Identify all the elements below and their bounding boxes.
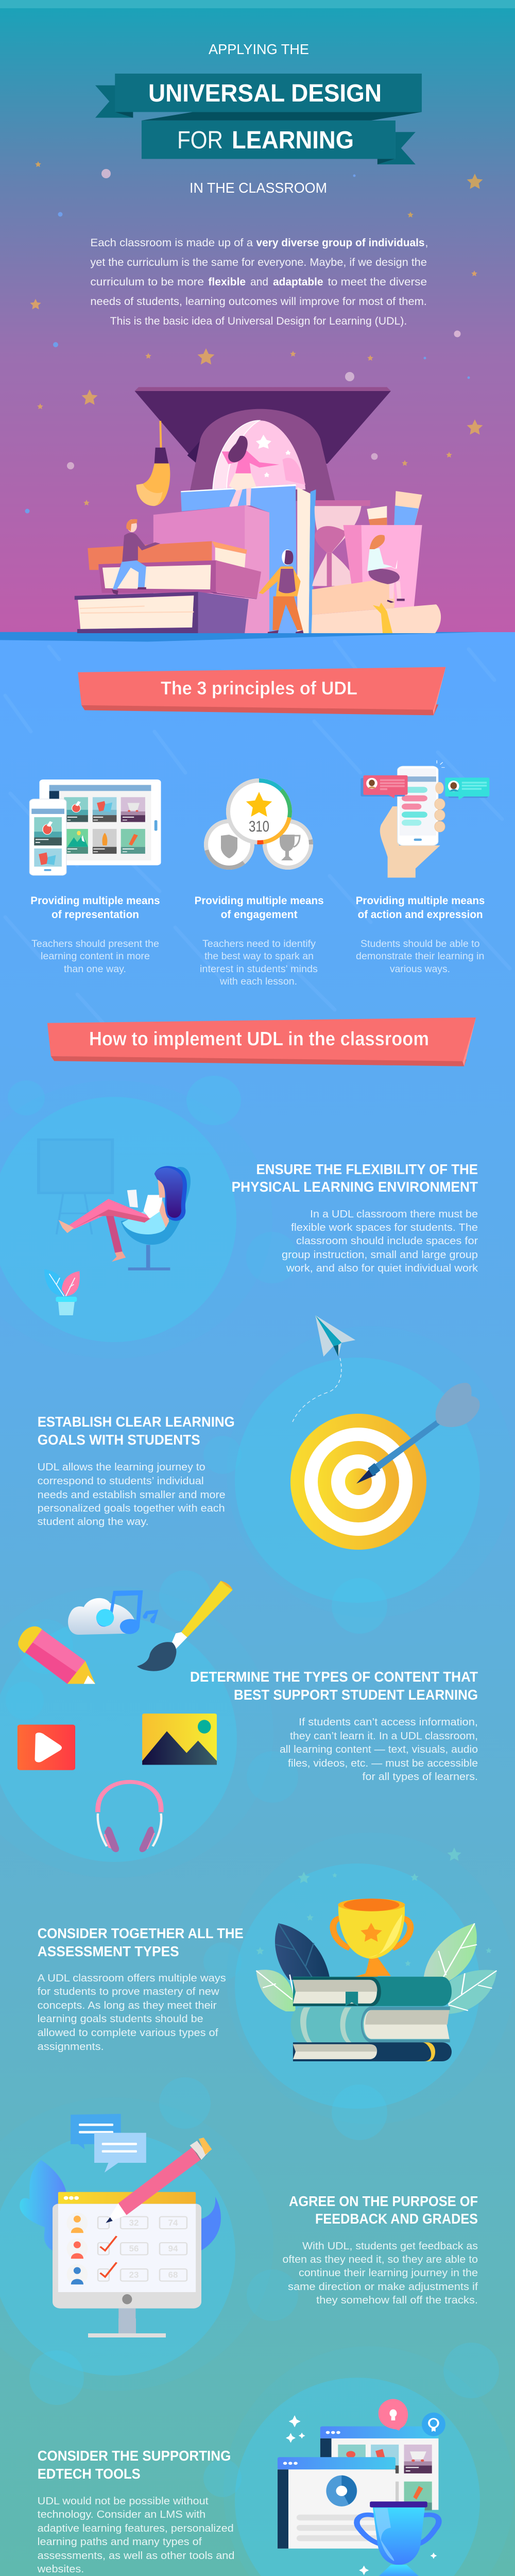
lower section gradient background [0,632,515,2576]
three principles descriptions: interest in students' minds [200,964,318,975]
text block: consider together all the assessment types [38,1925,244,2053]
tassel [136,421,170,506]
orange book [88,541,247,570]
small stars around the trophy [256,1848,492,1966]
text block: consider together all the assessment types: concepts. As long as they meet their [38,2000,217,2011]
text block: consider together all the assessment types: for students to prove mastery of new [38,1986,219,1997]
text block: consider together all the assessment types: learning goals students should be [38,2013,203,2025]
text block: determine types of content: they can’t learn it. In a UDL classroom, [290,1731,478,1742]
illustration: feedback and grades screen: 74 [168,2218,178,2228]
text block: ensure the flexibility: PHYSICAL LEARNING ENVIRONMENT [232,1179,478,1195]
student with backpack [259,549,303,633]
title ribbon banner: UNIVERSAL DESIGN [148,80,382,107]
text block: consider the supporting edtech tools [37,2448,234,2575]
text block: determine types of content: all learning content — text, visuals, audio [280,1744,478,1755]
text block: determine types of content: for all types of learners. [363,1771,478,1783]
text block: ensure the flexibility: ENSURE THE FLEXIBILITY OF THE [256,1161,478,1177]
intro paragraph: needs of students, learning outcomes will improve for most of them. [90,296,427,308]
three principles descriptions: than one way. [64,964,126,975]
chat bubbles [71,2114,146,2173]
text block: consider the supporting edtech tools: assessments, as well as other tools and [38,2550,234,2562]
three principles descriptions: various ways. [390,964,450,975]
text block: determine types of content [190,1669,478,1783]
pink book [153,505,269,633]
back window [320,2426,438,2511]
text block: determine types of content: If students can’t access information, [299,1717,478,1728]
text block: determine types of content: BEST SUPPORT STUDENT LEARNING [234,1687,478,1703]
three principles descriptions: learning content in more [41,951,150,962]
badges [379,2399,445,2436]
text block: ensure the flexibility: flexible work spaces for students. The [291,1222,478,1233]
monitor stand [118,2309,135,2326]
icon: headphones [98,1782,161,1852]
scrolls [312,579,441,633]
text block: establish clear learning goals: UDL allows the learning journey to [38,1462,205,1473]
three principles descriptions: Students should be able to [360,939,480,950]
three principles headings: of representation [52,909,139,921]
three principles descriptions: demonstrate their learning in [356,951,484,962]
intro paragraph: , [425,237,428,249]
text block: establish clear learning goals: ESTABLISH CLEAR LEARNING [38,1414,235,1430]
section banner: how to implement UDL: How to implement UDL in the classroom [89,1028,429,1050]
text block: ensure the flexibility: work, and also for quiet individual work [286,1263,478,1274]
header gradient background [0,0,515,639]
icon: target with dart [290,1383,480,1550]
text block: consider the supporting edtech tools: EDTECH TOOLS [38,2466,141,2482]
text block: ensure the flexibility: classroom should include spaces for [296,1235,478,1247]
check marks [100,2236,116,2277]
text block: establish clear learning goals: student along the way. [38,1516,149,1528]
text block: ensure the flexibility: group instruction, small and large group [282,1249,478,1261]
girl on the book [222,436,279,508]
title ribbon banner [95,74,422,164]
illustration: feedback and grades screen: 32 [129,2218,139,2228]
intro paragraph: This is the basic idea of Universal Design for Learning (UDL). [110,315,407,327]
three principles descriptions: the best way to spark an [204,951,314,962]
text block: consider together all the assessment types: allowed to complete various types of [38,2027,218,2039]
text block: consider the supporting edtech tools: learning paths and many types of [38,2536,202,2548]
graduation cap [134,387,391,501]
sparkles [286,2415,437,2575]
section banner: the 3 principles of UDL [78,667,445,715]
star decorations in the dome [256,435,290,477]
icon: play button [18,1724,75,1770]
three principles headings: Providing multiple means [30,895,160,907]
text block: establish clear learning goals: GOALS WITH STUDENTS [38,1432,200,1448]
title: in the classroom: IN THE CLASSROOM [190,180,327,196]
three principles headings [30,895,485,921]
text block: determine types of content: DETERMINE THE TYPES OF CONTENT THAT [190,1669,478,1685]
text block: agree on the purpose of feedback: same direction or make adjustments if [288,2281,478,2293]
woman [59,1166,187,1262]
text block: consider together all the assessment types: assignments. [38,2041,104,2053]
title: applying the: APPLYING THE [209,41,309,57]
title ribbon banner: FOR [177,127,223,154]
text block: establish clear learning goals: correspond to students’ individual [38,1476,204,1487]
text block: establish clear learning goals [38,1414,235,1528]
section banner: how to implement UDL [47,1018,476,1066]
grade rows [98,2217,187,2281]
text block: consider the supporting edtech tools: adaptive learning features, personalized [38,2523,234,2534]
intro paragraph: very diverse group of individuals [256,237,424,249]
icon: tablet and phone with course cards [29,779,161,875]
icon: badges with score 310 [204,778,313,870]
decorative stars and dots [25,161,483,513]
intro paragraph: curriculum to be more [90,276,204,288]
bottom purple book [75,592,249,633]
easel [37,1139,114,1234]
illustration: feedback and grades screen [20,2114,221,2337]
central score badge [226,778,292,844]
illustration: feedback and grades screen: 23 [129,2270,139,2280]
gold trophy [333,1899,410,1977]
stacked books [290,1977,452,2061]
text block: consider the supporting edtech tools: CONSIDER THE SUPPORTING [38,2448,231,2464]
intro paragraph: and [250,276,268,288]
three principles headings: Providing multiple means [195,895,324,907]
text block: agree on the purpose of feedback: they somehow fall off the tracks. [316,2295,478,2306]
text block: establish clear learning goals: needs and establish smaller and more [38,1489,226,1501]
monitor [53,2192,201,2309]
section banner: the 3 principles of UDL: The 3 principles of UDL [161,677,357,699]
intro paragraph: adaptable [273,276,323,288]
icon: pencil [18,1626,95,1684]
middle book [98,560,261,599]
intro paragraph: yet the curriculum is the same for everyone. Maybe, if we design the [90,257,427,268]
illustration: feedback and grades screen: 94 [168,2244,178,2253]
illustration: woman reading in a chair by an easel [37,1139,191,1315]
text block: consider together all the assessment types: ASSESSMENT TYPES [38,1943,179,1959]
icon: image with mountains [142,1714,217,1765]
leaves behind screen [20,2160,221,2250]
three principles headings: Providing multiple means [356,895,485,907]
title ribbon banner: LEARNING [232,127,354,154]
illustration: feedback and grades screen: 56 [129,2244,139,2253]
illustration: content type icons [18,1581,233,1852]
intro paragraph [90,237,428,327]
illustration: graduation cap with books and students [0,387,483,642]
pencil writing [106,2138,212,2223]
three principles descriptions: Teachers should present the [31,939,159,950]
text block: consider the supporting edtech tools: UDL would not be possible without [38,2496,209,2507]
chair [121,1167,191,1270]
three principles descriptions: Teachers need to identify [202,939,316,950]
text block: agree on the purpose of feedback: often as they need it, so they are able to [282,2254,478,2265]
text block: agree on the purpose of feedback: FEEDBACK AND GRADES [315,2211,478,2227]
left shield badge [204,819,254,870]
wave under the scene [0,632,483,642]
text block: consider the supporting edtech tools: websites. [37,2564,84,2575]
blue book standing [181,484,316,633]
text block: establish clear learning goals: personalized goals together with each [38,1503,225,1514]
icon: paper plane with dashed trail [293,1315,355,1422]
hourglass [312,500,370,586]
climbing man [112,519,160,595]
text block: consider together all the assessment types: CONSIDER TOGETHER ALL THE [38,1925,244,1941]
three principles descriptions [31,939,484,987]
icon: hand holding phone with chat bubbles [360,760,489,878]
intro paragraph: flexible [208,276,246,288]
intro paragraph: to meet the diverse [328,276,427,288]
avatars [66,2212,88,2285]
icon: badges with score 310: 310 [249,818,269,835]
three principles descriptions: with each lesson. [219,976,297,987]
text block: agree on the purpose of feedback: With UDL, students get feedback as [302,2241,478,2252]
seated woman with laptop [367,535,405,603]
leaves [256,1923,496,2014]
three principles headings: of engagement [221,909,298,921]
illustration: LMS windows with blue trophy [278,2399,445,2576]
text block: ensure the flexibility: In a UDL classroom there must be [310,1209,478,1220]
text block: consider together all the assessment types: A UDL classroom offers multiple ways [38,1973,226,1984]
text block: agree on the purpose of feedback: continue their learning journey in the [299,2267,478,2279]
text block: ensure the flexibility [232,1161,478,1274]
three principles headings: of action and expression [358,909,483,921]
blue trophy [357,2501,439,2576]
intro paragraph: Each classroom is made up of a [90,237,253,249]
text block: determine types of content: files, videos, etc. — must be accessible [288,1758,478,1769]
background circles and blobs [0,1076,514,2576]
small potted plant [44,1269,80,1315]
illustration: feedback and grades screen: 68 [168,2270,178,2280]
icon: paint brush [137,1581,233,1671]
pink standing book with small books [344,491,422,608]
right trophy badge [263,819,313,870]
text block: agree on the purpose of feedback [282,2193,478,2306]
text block: agree on the purpose of feedback: AGREE ON THE PURPOSE OF [289,2193,478,2209]
illustration: trophy on stacked books [256,1899,496,2061]
icon: cloud with music note [68,1590,158,1635]
text block: consider the supporting edtech tools: technology. Consider an LMS with [38,2509,205,2520]
diagonal background stripes [5,641,510,1046]
front window [278,2457,396,2549]
